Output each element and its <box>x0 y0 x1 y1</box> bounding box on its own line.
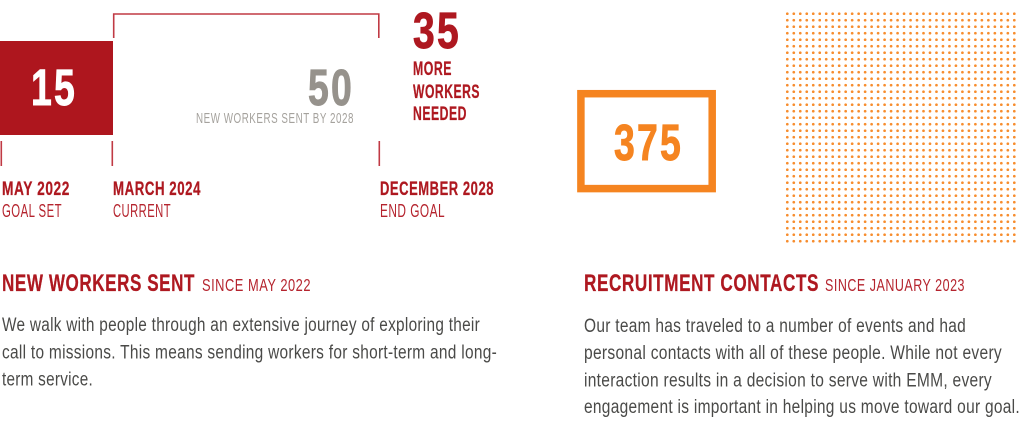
text block: new workers sent <box>2 270 497 390</box>
body text: term service. <box>2 370 93 390</box>
goal number 50: NEW WORKERS SENT BY 2028 <box>196 111 354 127</box>
body text: call to missions. This means sending workers for short-term and long- <box>2 342 497 364</box>
body text <box>2 315 497 390</box>
heading: SINCE MAY 2022 <box>202 275 311 295</box>
orange box with 375 <box>581 94 712 189</box>
heading: NEW WORKERS SENT <box>2 270 195 297</box>
callout: 35 more workers needed: 35 <box>413 2 461 59</box>
date label: December 2028: DECEMBER 2028 <box>380 179 494 200</box>
progress box with 15 <box>0 41 113 135</box>
body text <box>584 316 1020 418</box>
progress box with 15: 15 <box>31 59 77 116</box>
heading: RECRUITMENT CONTACTS <box>584 270 819 297</box>
orange box with 375: 375 <box>614 114 683 171</box>
text block: recruitment contacts <box>584 270 1020 418</box>
date label: March 2024: MARCH 2024 <box>113 179 201 200</box>
dot field <box>787 14 1016 241</box>
date label: May 2022: MAY 2022 <box>2 179 70 200</box>
timeline ticks <box>1 141 379 166</box>
date label: May 2022 <box>2 179 70 221</box>
callout: 35 more workers needed: MORE <box>413 59 452 80</box>
heading: SINCE JANUARY 2023 <box>825 275 965 295</box>
panel: new workers timeline <box>0 2 494 221</box>
body text: We walk with people through an extensive journey of exploring their <box>2 315 480 336</box>
goal number 50 <box>196 59 354 127</box>
goal bracket <box>114 14 379 38</box>
date label: May 2022: GOAL SET <box>2 201 62 221</box>
date label: December 2028 <box>380 179 494 221</box>
date label: December 2028: END GOAL <box>380 201 445 221</box>
callout: 35 more workers needed <box>413 2 480 125</box>
date label: March 2024 <box>113 179 201 221</box>
panel: recruitment contacts figure <box>581 14 1016 241</box>
callout: 35 more workers needed: NEEDED <box>413 104 467 125</box>
goal number 50: 50 <box>308 59 354 116</box>
callout: 35 more workers needed: WORKERS <box>413 82 480 103</box>
date label: March 2024: CURRENT <box>113 201 171 221</box>
